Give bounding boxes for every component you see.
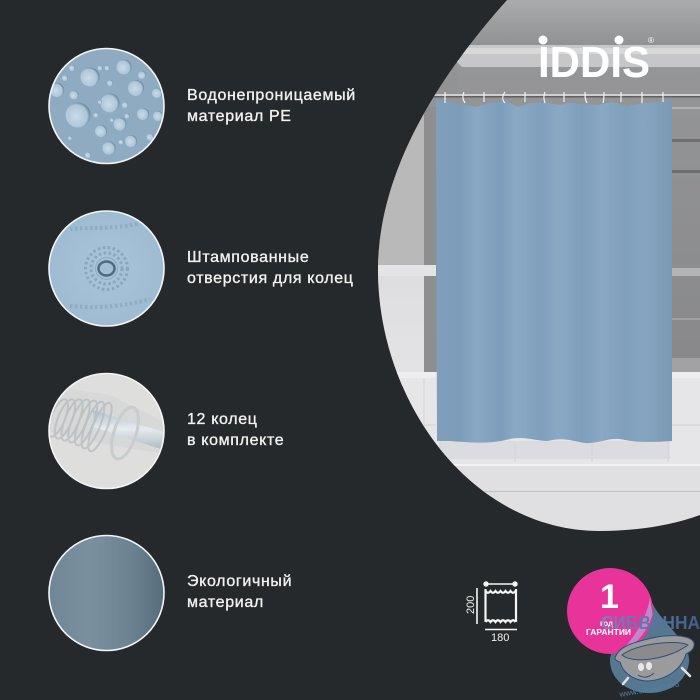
curtain shadow — [440, 441, 670, 459]
curtain rings — [445, 92, 663, 103]
bathtub — [615, 636, 694, 681]
feature: 12 rings: в комплекте — [187, 432, 284, 449]
crown molding — [455, 45, 700, 67]
feature: eco material: материал — [187, 594, 264, 611]
guarantee badge — [567, 568, 653, 654]
guarantee badge: ГАРАНТИИ — [586, 627, 631, 637]
size icon — [465, 581, 518, 644]
watermark: bath logo — [601, 597, 700, 699]
feature: stamped holes: отверстия для колец — [187, 270, 354, 287]
icon: material swatch — [49, 536, 164, 650]
icon: stamped ring hole — [49, 211, 164, 326]
watermark: drop — [610, 597, 689, 693]
feature: waterproof material: материал PE — [187, 108, 292, 125]
url: www.sibvanna.ru — [618, 680, 680, 699]
label: 12 колец — [187, 411, 258, 428]
label: Экологичный — [187, 573, 292, 590]
icon: rod with rings — [40, 374, 170, 488]
left wall upper — [428, 64, 456, 106]
wainscot rail — [378, 265, 436, 276]
guarantee badge: год — [600, 619, 613, 628]
label: Штампованные — [187, 249, 309, 266]
feature: 12 rings — [40, 374, 284, 488]
back wall — [370, 60, 700, 372]
feature: stamped holes — [49, 211, 354, 326]
ceiling — [468, 0, 700, 48]
feature: eco material — [49, 536, 292, 650]
bathroom photo panel — [370, 0, 700, 535]
height value: 200 — [465, 596, 477, 614]
left wall light — [378, 114, 424, 265]
logo: IDDIS: ® — [648, 36, 654, 45]
logo: IDDIS: IDDIS — [538, 38, 650, 87]
bathtub front — [370, 372, 700, 378]
curtain — [436, 99, 672, 443]
label: Водонепроницаемый — [187, 87, 356, 104]
guarantee badge: 1 — [600, 578, 619, 616]
icon: water droplets — [49, 48, 164, 164]
tile lines — [422, 378, 700, 462]
feature: waterproof material — [49, 48, 356, 164]
niche — [424, 108, 428, 114]
curtain rod — [428, 94, 700, 96]
peeled corner — [620, 597, 652, 652]
width value: 180 — [491, 632, 509, 644]
floor steps — [454, 465, 700, 531]
right wall details — [672, 107, 700, 372]
curtain glyph — [477, 584, 517, 630]
tile panel left — [378, 276, 424, 386]
